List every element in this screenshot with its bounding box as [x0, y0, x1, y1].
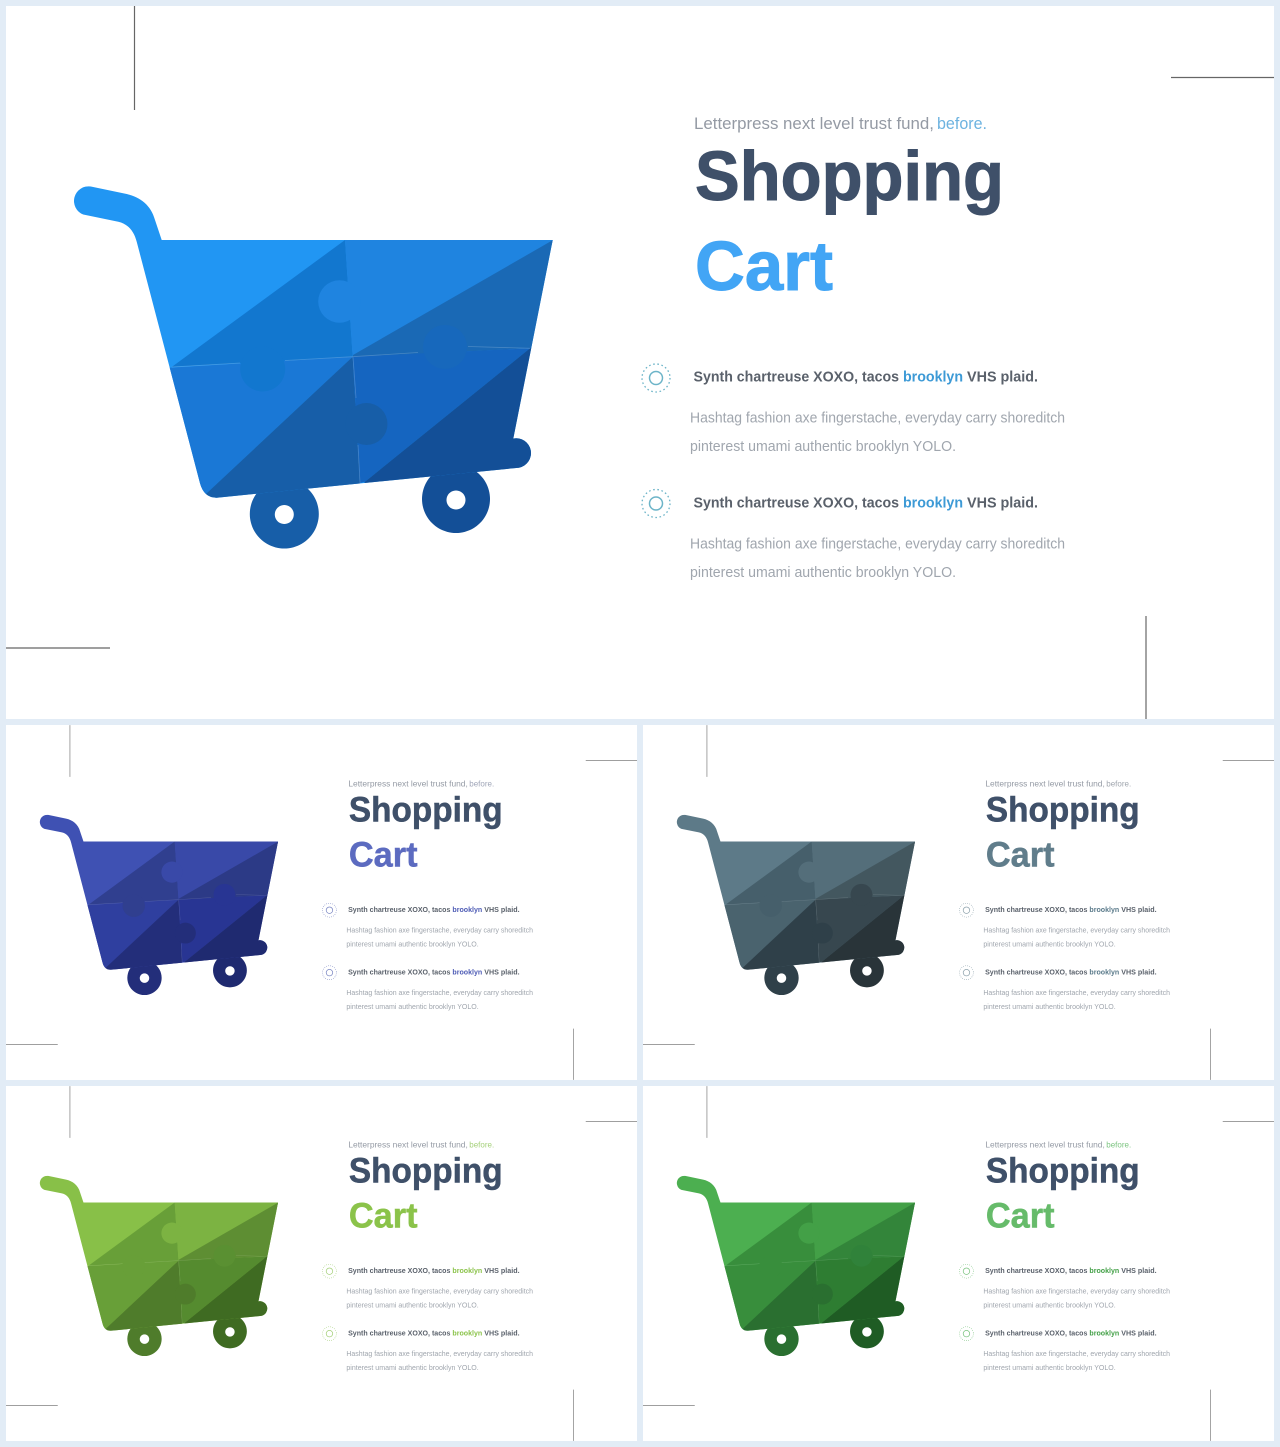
- left wheel: [127, 1322, 162, 1356]
- bullet icon: [959, 966, 973, 980]
- bullet text: Hashtag fashion axe fingerstache, everyday carry shoreditch: [690, 536, 1065, 552]
- bullet heading: Synth chartreuse XOXO, tacos: [348, 905, 450, 914]
- right wheel: [850, 1315, 884, 1348]
- bullet text: [983, 1349, 1170, 1372]
- bullet heading: brooklyn: [452, 968, 483, 977]
- bullet text: [346, 988, 533, 1011]
- bullet heading: VHS plaid.: [967, 494, 1038, 512]
- bullet icon: [959, 1327, 973, 1341]
- bullet heading: brooklyn: [452, 1266, 483, 1275]
- bullet text: Hashtag fashion axe fingerstache, everyday carry shoreditch: [346, 925, 533, 934]
- left wheel: [764, 961, 799, 995]
- bullet heading: VHS plaid.: [484, 1266, 520, 1275]
- bullet icon: [322, 966, 336, 980]
- left wheel: [127, 961, 162, 995]
- bullet text: [983, 988, 1170, 1011]
- bullet icon: [322, 1327, 336, 1341]
- subtitle: before.: [469, 1139, 494, 1149]
- bullet text: pinterest umami authentic brooklyn YOLO.: [983, 940, 1116, 949]
- bullet text: [346, 925, 533, 949]
- bullet heading: brooklyn: [903, 368, 963, 386]
- bullet heading: Synth chartreuse XOXO, tacos: [348, 1329, 450, 1338]
- title: Cart: Cart: [349, 1196, 418, 1235]
- bullet heading: brooklyn: [1089, 905, 1120, 914]
- bullet icon: [322, 1264, 336, 1278]
- bullet heading: VHS plaid.: [1121, 1266, 1157, 1275]
- bullet heading: VHS plaid.: [1121, 905, 1157, 914]
- bullet text: Hashtag fashion axe fingerstache, everyday carry shoreditch: [983, 988, 1170, 997]
- bullet text: pinterest umami authentic brooklyn YOLO.: [346, 1363, 479, 1372]
- subtitle: Letterpress next level trust fund,: [985, 1139, 1105, 1149]
- bullet heading: VHS plaid.: [1121, 1329, 1157, 1338]
- bullet heading: Synth chartreuse XOXO, tacos: [985, 905, 1087, 914]
- corner lines: [6, 1086, 637, 1441]
- corner lines: [643, 1086, 1274, 1441]
- cart body puzzle pieces: [676, 1176, 915, 1331]
- subtitle: Letterpress next level trust fund,: [348, 778, 468, 788]
- title: Shopping: Shopping: [695, 137, 1004, 215]
- cart body puzzle pieces: [40, 1176, 278, 1331]
- bullet 1: [322, 903, 533, 949]
- panel: main blue slide: [6, 6, 1274, 719]
- bullet heading: Synth chartreuse XOXO, tacos: [348, 968, 450, 977]
- bullet 2: [642, 490, 1065, 581]
- bullet text: [346, 1349, 533, 1372]
- bullet text: pinterest umami authentic brooklyn YOLO.: [346, 940, 479, 949]
- bullet heading: Synth chartreuse XOXO, tacos: [694, 494, 899, 512]
- panel: lime slide: [6, 1086, 637, 1441]
- title: Cart: Cart: [986, 1196, 1055, 1235]
- bullet heading: VHS plaid.: [484, 905, 520, 914]
- bullet 2: [959, 966, 1170, 1011]
- bullet heading: [985, 968, 1157, 977]
- bullet heading: VHS plaid.: [484, 968, 520, 977]
- title: Shopping: Shopping: [349, 1152, 503, 1191]
- bullet 1: [322, 1264, 533, 1310]
- bullet text: pinterest umami authentic brooklyn YOLO.: [690, 564, 956, 581]
- bullet text: pinterest umami authentic brooklyn YOLO.: [346, 1301, 479, 1310]
- bullet text: Hashtag fashion axe fingerstache, everyday carry shoreditch: [983, 1286, 1170, 1295]
- bullet text: [983, 925, 1170, 949]
- cart body puzzle pieces: [40, 814, 278, 970]
- bullet heading: brooklyn: [1089, 968, 1120, 977]
- right wheel: [422, 465, 490, 533]
- bullet heading: [985, 1329, 1157, 1338]
- bullet icon: [959, 1264, 973, 1278]
- bullet heading: VHS plaid.: [967, 368, 1038, 386]
- bullet heading: VHS plaid.: [1121, 968, 1157, 977]
- bullet text: pinterest umami authentic brooklyn YOLO.: [690, 438, 956, 455]
- bullet 1: [959, 903, 1170, 949]
- bullet icon: [959, 903, 973, 917]
- bullet icon: [642, 364, 670, 392]
- icon: shopping cart puzzle: [670, 1168, 924, 1356]
- bullet heading: Synth chartreuse XOXO, tacos: [348, 1266, 450, 1275]
- corner lines: [643, 725, 1274, 1080]
- bullet heading: Synth chartreuse XOXO, tacos: [985, 968, 1087, 977]
- bullet heading: [348, 968, 520, 977]
- subtitle: Letterpress next level trust fund,: [985, 778, 1105, 788]
- bullet text: Hashtag fashion axe fingerstache, everyday carry shoreditch: [346, 988, 533, 997]
- bullet heading: brooklyn: [1089, 1266, 1120, 1275]
- bullet heading: brooklyn: [452, 1329, 483, 1338]
- icon: shopping cart puzzle: [670, 807, 924, 995]
- subtitle: Letterpress next level trust fund,: [694, 114, 934, 133]
- bullet heading: Synth chartreuse XOXO, tacos: [985, 1266, 1087, 1275]
- bullet text: [690, 536, 1065, 581]
- panel: green slide: [643, 1086, 1274, 1441]
- bullet 1: [959, 1264, 1170, 1310]
- bullet 2: [322, 1327, 533, 1372]
- bullet text: Hashtag fashion axe fingerstache, everyday carry shoreditch: [690, 410, 1065, 426]
- bullet 1: [642, 364, 1065, 455]
- bullet icon: [642, 490, 670, 518]
- left wheel: [764, 1322, 799, 1356]
- title: Cart: Cart: [695, 227, 833, 305]
- bullet icon: [322, 903, 336, 917]
- bullet heading: [985, 1266, 1157, 1275]
- bullet text: [690, 410, 1065, 455]
- bullet text: pinterest umami authentic brooklyn YOLO.: [346, 1002, 479, 1011]
- bullet text: Hashtag fashion axe fingerstache, everyday carry shoreditch: [983, 1349, 1170, 1358]
- bullet heading: VHS plaid.: [484, 1329, 520, 1338]
- bullet heading: [348, 905, 520, 914]
- icon: shopping cart puzzle: [33, 807, 287, 995]
- subtitle: before.: [1106, 778, 1131, 788]
- cart body puzzle pieces: [676, 814, 915, 970]
- title: Cart: Cart: [349, 835, 418, 874]
- bullet heading: [348, 1266, 520, 1275]
- bullet text: pinterest umami authentic brooklyn YOLO.: [983, 1002, 1116, 1011]
- subtitle: before.: [1106, 1139, 1131, 1149]
- bullet 2: [322, 966, 533, 1011]
- bullet text: [346, 1286, 533, 1310]
- bullet heading: Synth chartreuse XOXO, tacos: [694, 368, 899, 386]
- bullet heading: brooklyn: [452, 905, 483, 914]
- bullet text: pinterest umami authentic brooklyn YOLO.: [983, 1301, 1116, 1310]
- icon: shopping cart puzzle: [74, 186, 553, 548]
- panel: indigo slide: [6, 725, 637, 1080]
- bullet heading: brooklyn: [1089, 1329, 1120, 1338]
- bullet text: Hashtag fashion axe fingerstache, everyday carry shoreditch: [346, 1286, 533, 1295]
- title: Cart: Cart: [986, 835, 1055, 874]
- right wheel: [213, 954, 247, 987]
- title: Shopping: Shopping: [349, 791, 503, 830]
- title: Shopping: Shopping: [986, 1152, 1140, 1191]
- subtitle: before.: [469, 778, 494, 788]
- bullet text: Hashtag fashion axe fingerstache, everyday carry shoreditch: [346, 1349, 533, 1358]
- bullet heading: [694, 494, 1038, 512]
- panel: slate slide: [643, 725, 1274, 1080]
- bullet text: Hashtag fashion axe fingerstache, everyday carry shoreditch: [983, 925, 1170, 934]
- cart body puzzle pieces: [74, 186, 553, 498]
- corner lines: [6, 6, 1274, 719]
- title: Shopping: Shopping: [986, 791, 1140, 830]
- icon: shopping cart puzzle: [33, 1168, 287, 1356]
- bullet 2: [959, 1327, 1170, 1372]
- left wheel: [250, 480, 319, 549]
- bullet heading: [694, 368, 1038, 386]
- bullet heading: [348, 1329, 520, 1338]
- right wheel: [213, 1315, 247, 1348]
- bullet text: [983, 1286, 1170, 1310]
- bullet heading: Synth chartreuse XOXO, tacos: [985, 1329, 1087, 1338]
- right wheel: [850, 954, 884, 987]
- subtitle: before.: [937, 114, 987, 133]
- subtitle: Letterpress next level trust fund,: [348, 1139, 468, 1149]
- bullet text: pinterest umami authentic brooklyn YOLO.: [983, 1363, 1116, 1372]
- bullet heading: brooklyn: [903, 494, 963, 512]
- corner lines: [6, 725, 637, 1080]
- bullet heading: [985, 905, 1157, 914]
